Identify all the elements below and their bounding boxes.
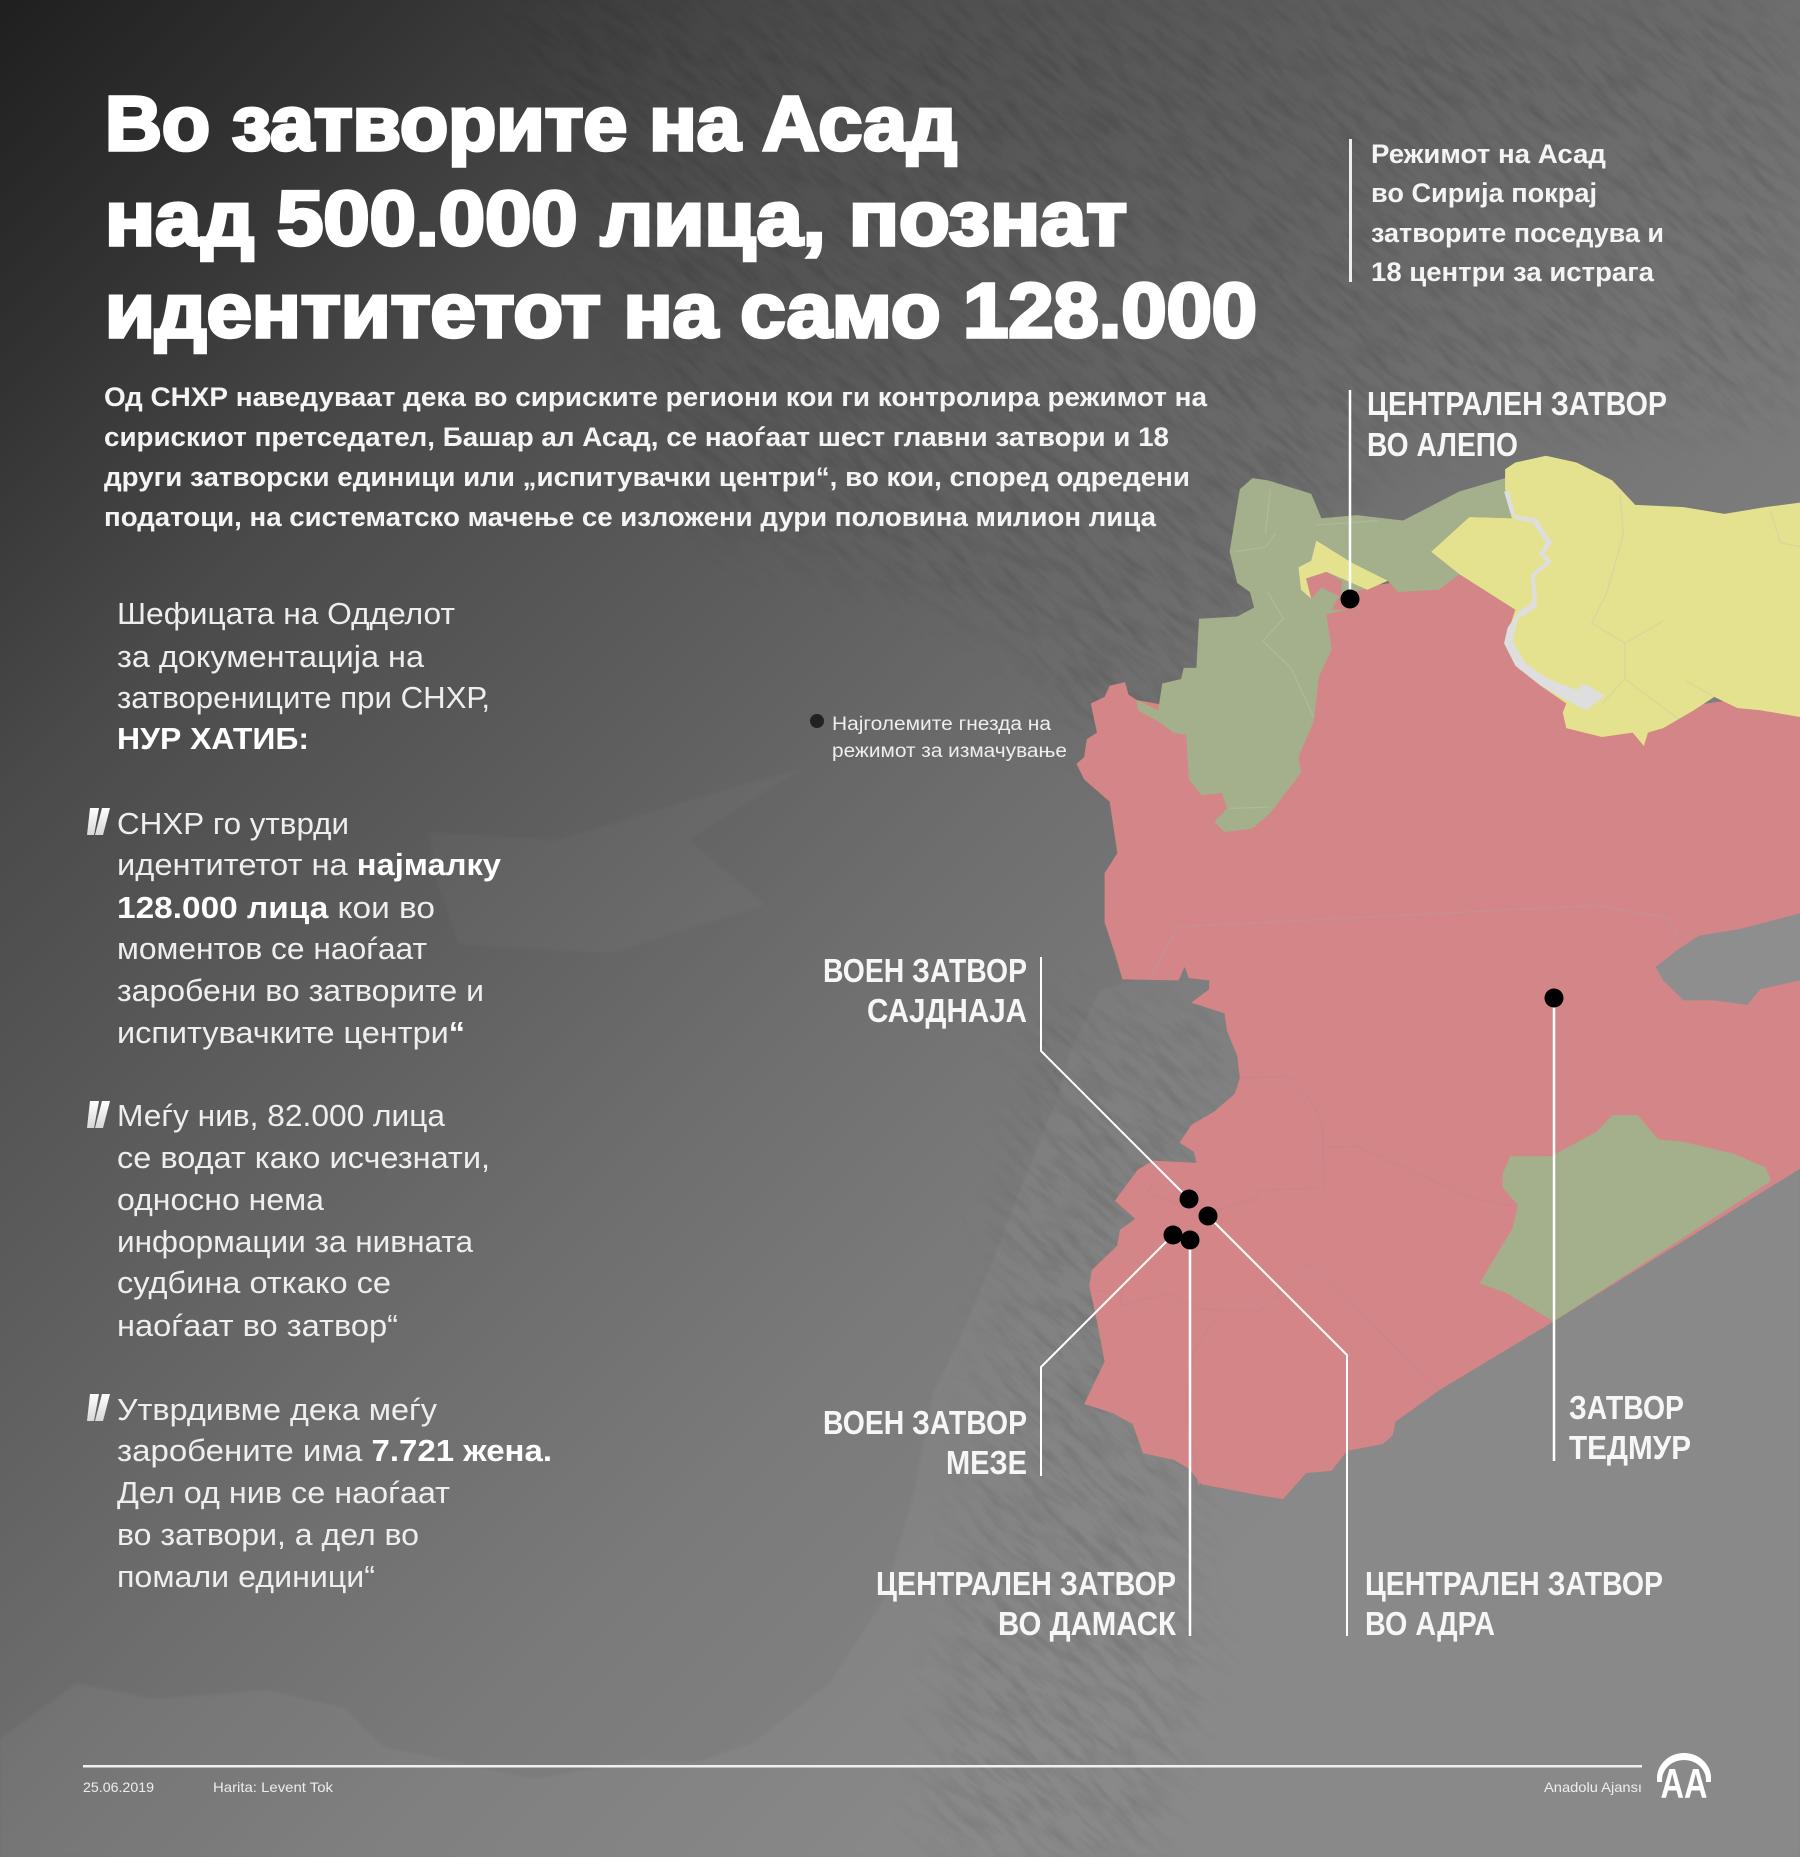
side note: во Сирија покрај [1371, 178, 1597, 208]
quote 1: испитувачките центри “ [117, 1015, 465, 1050]
label: Aleppo central prison: ЦЕНТРАЛЕН ЗАТВОР [1367, 385, 1667, 422]
quote 2: судбина откако се [117, 1265, 391, 1300]
quote 2: Меѓу нив, 82.000 лица [117, 1098, 446, 1133]
speaker introduction: Шефицата на Одделот [117, 596, 455, 631]
grey desert enclave [1656, 913, 1800, 1005]
icon: quote mark [87, 1394, 110, 1421]
side note: затворите поседува и [1371, 218, 1664, 248]
regime territory [1077, 574, 1800, 1499]
quote 1: идентитетот на најмалку [117, 847, 502, 882]
quote 2: информации за нивната [117, 1224, 474, 1259]
label: Sednaya military prison: ВОЕН ЗАТВОР [823, 952, 1027, 989]
quote 3: помали единици“ [117, 1559, 375, 1594]
Kurdish-held territory [1298, 456, 1800, 746]
intro paragraph: сирискиот претседател, Башар ал Асад, се наоѓаат шест главни затвори и 18 [104, 422, 1169, 452]
quote 2: се водат како исчезнати, [117, 1140, 490, 1175]
label: Sednaya military prison [823, 952, 1198, 1208]
side note: Режимот на Асад [1371, 139, 1606, 169]
label: Damascus central prison: ВО ДАМАСК [998, 1605, 1177, 1642]
legend: Најголемите гнезда на [832, 714, 1051, 735]
label: Tadmur prison: ТЕДМУР [1569, 1429, 1691, 1466]
quote 1 [87, 806, 502, 1050]
side note: 18 центри за истрага [1371, 257, 1655, 287]
quote 3: заробените има 7.721 жена. [117, 1433, 552, 1468]
quote 1: СНХР го утврди [117, 806, 349, 841]
label: Mezzeh military prison: ВОЕН ЗАТВОР [823, 1404, 1027, 1441]
title: Во затворите на Асад [105, 81, 957, 167]
logo: Anadolu Agency: AA [1660, 1760, 1708, 1807]
legend: режимот за измачување [832, 741, 1067, 762]
label: Damascus central prison: ЦЕНТРАЛЕН ЗАТВОР [876, 1565, 1176, 1602]
label: Sednaya military prison: САЈДНАЈА [867, 992, 1027, 1029]
map of Syria [1077, 456, 1800, 1499]
speaker introduction [117, 596, 490, 756]
speaker introduction: за документација на [117, 639, 425, 674]
quote 2 [87, 1098, 490, 1343]
footer: Harita: Levent Tok [213, 1779, 334, 1795]
quote 3: Утврдивме дека меѓу [117, 1392, 438, 1427]
icon: quote mark [87, 1101, 110, 1128]
label: Adra central prison: ВО АДРА [1365, 1605, 1495, 1642]
label: Tadmur prison: ЗАТВОР [1569, 1389, 1684, 1426]
label: Adra central prison: ЦЕНТРАЛЕН ЗАТВОР [1365, 1565, 1663, 1602]
intro paragraph: други затворски единици или „испитувачки центри“, во кои, според одредени [104, 462, 1190, 492]
label: Mezzeh military prison [823, 1226, 1182, 1481]
quote 2: наоѓаат во затвор“ [117, 1308, 398, 1343]
icon: quote mark [87, 808, 110, 835]
intro paragraph [104, 382, 1208, 532]
logo: Anadolu Agency [1657, 1753, 1711, 1807]
quote 2: односно нема [117, 1182, 325, 1217]
opposition-held territory [1137, 478, 1771, 1321]
footer: 25.06.2019 [83, 1779, 154, 1795]
side note [1349, 139, 1664, 287]
legend [810, 714, 1067, 762]
quote 3 [87, 1392, 552, 1594]
footer [83, 1765, 1642, 1795]
label: Adra central prison [1198, 1206, 1663, 1642]
title [105, 81, 1257, 354]
label: Damascus central prison [876, 1230, 1200, 1642]
speaker introduction: НУР ХАТИБ: [117, 721, 309, 756]
label: Mezzeh military prison: МЕЗЕ [946, 1444, 1027, 1481]
speaker introduction: затворениците при СНХР, [117, 680, 490, 715]
intro paragraph: податоци, на систематско мачење се изложени дури половина милион лица [104, 502, 1157, 532]
quote 3: Дел од нив се наоѓаат [117, 1475, 450, 1510]
label: Aleppo central prison [1340, 385, 1667, 608]
quote 1: 128.000 лица кои во [117, 890, 435, 925]
label: Aleppo central prison: ВО АЛЕПО [1367, 426, 1518, 463]
quote 3: во затвори, а дел во [117, 1517, 419, 1552]
footer: Anadolu Ajansı [1544, 1779, 1642, 1795]
intro paragraph: Од СНХР наведуваат дека во сириските региони кои ги контролира режимот на [104, 382, 1208, 412]
quote 1: моментов се наоѓаат [117, 931, 427, 966]
label: Tadmur prison [1544, 988, 1691, 1466]
quote 1: заробени во затворите и [117, 973, 484, 1008]
title: над 500.000 лица, познат [105, 176, 1127, 262]
title: идентитетот на само 128.000 [105, 268, 1257, 354]
